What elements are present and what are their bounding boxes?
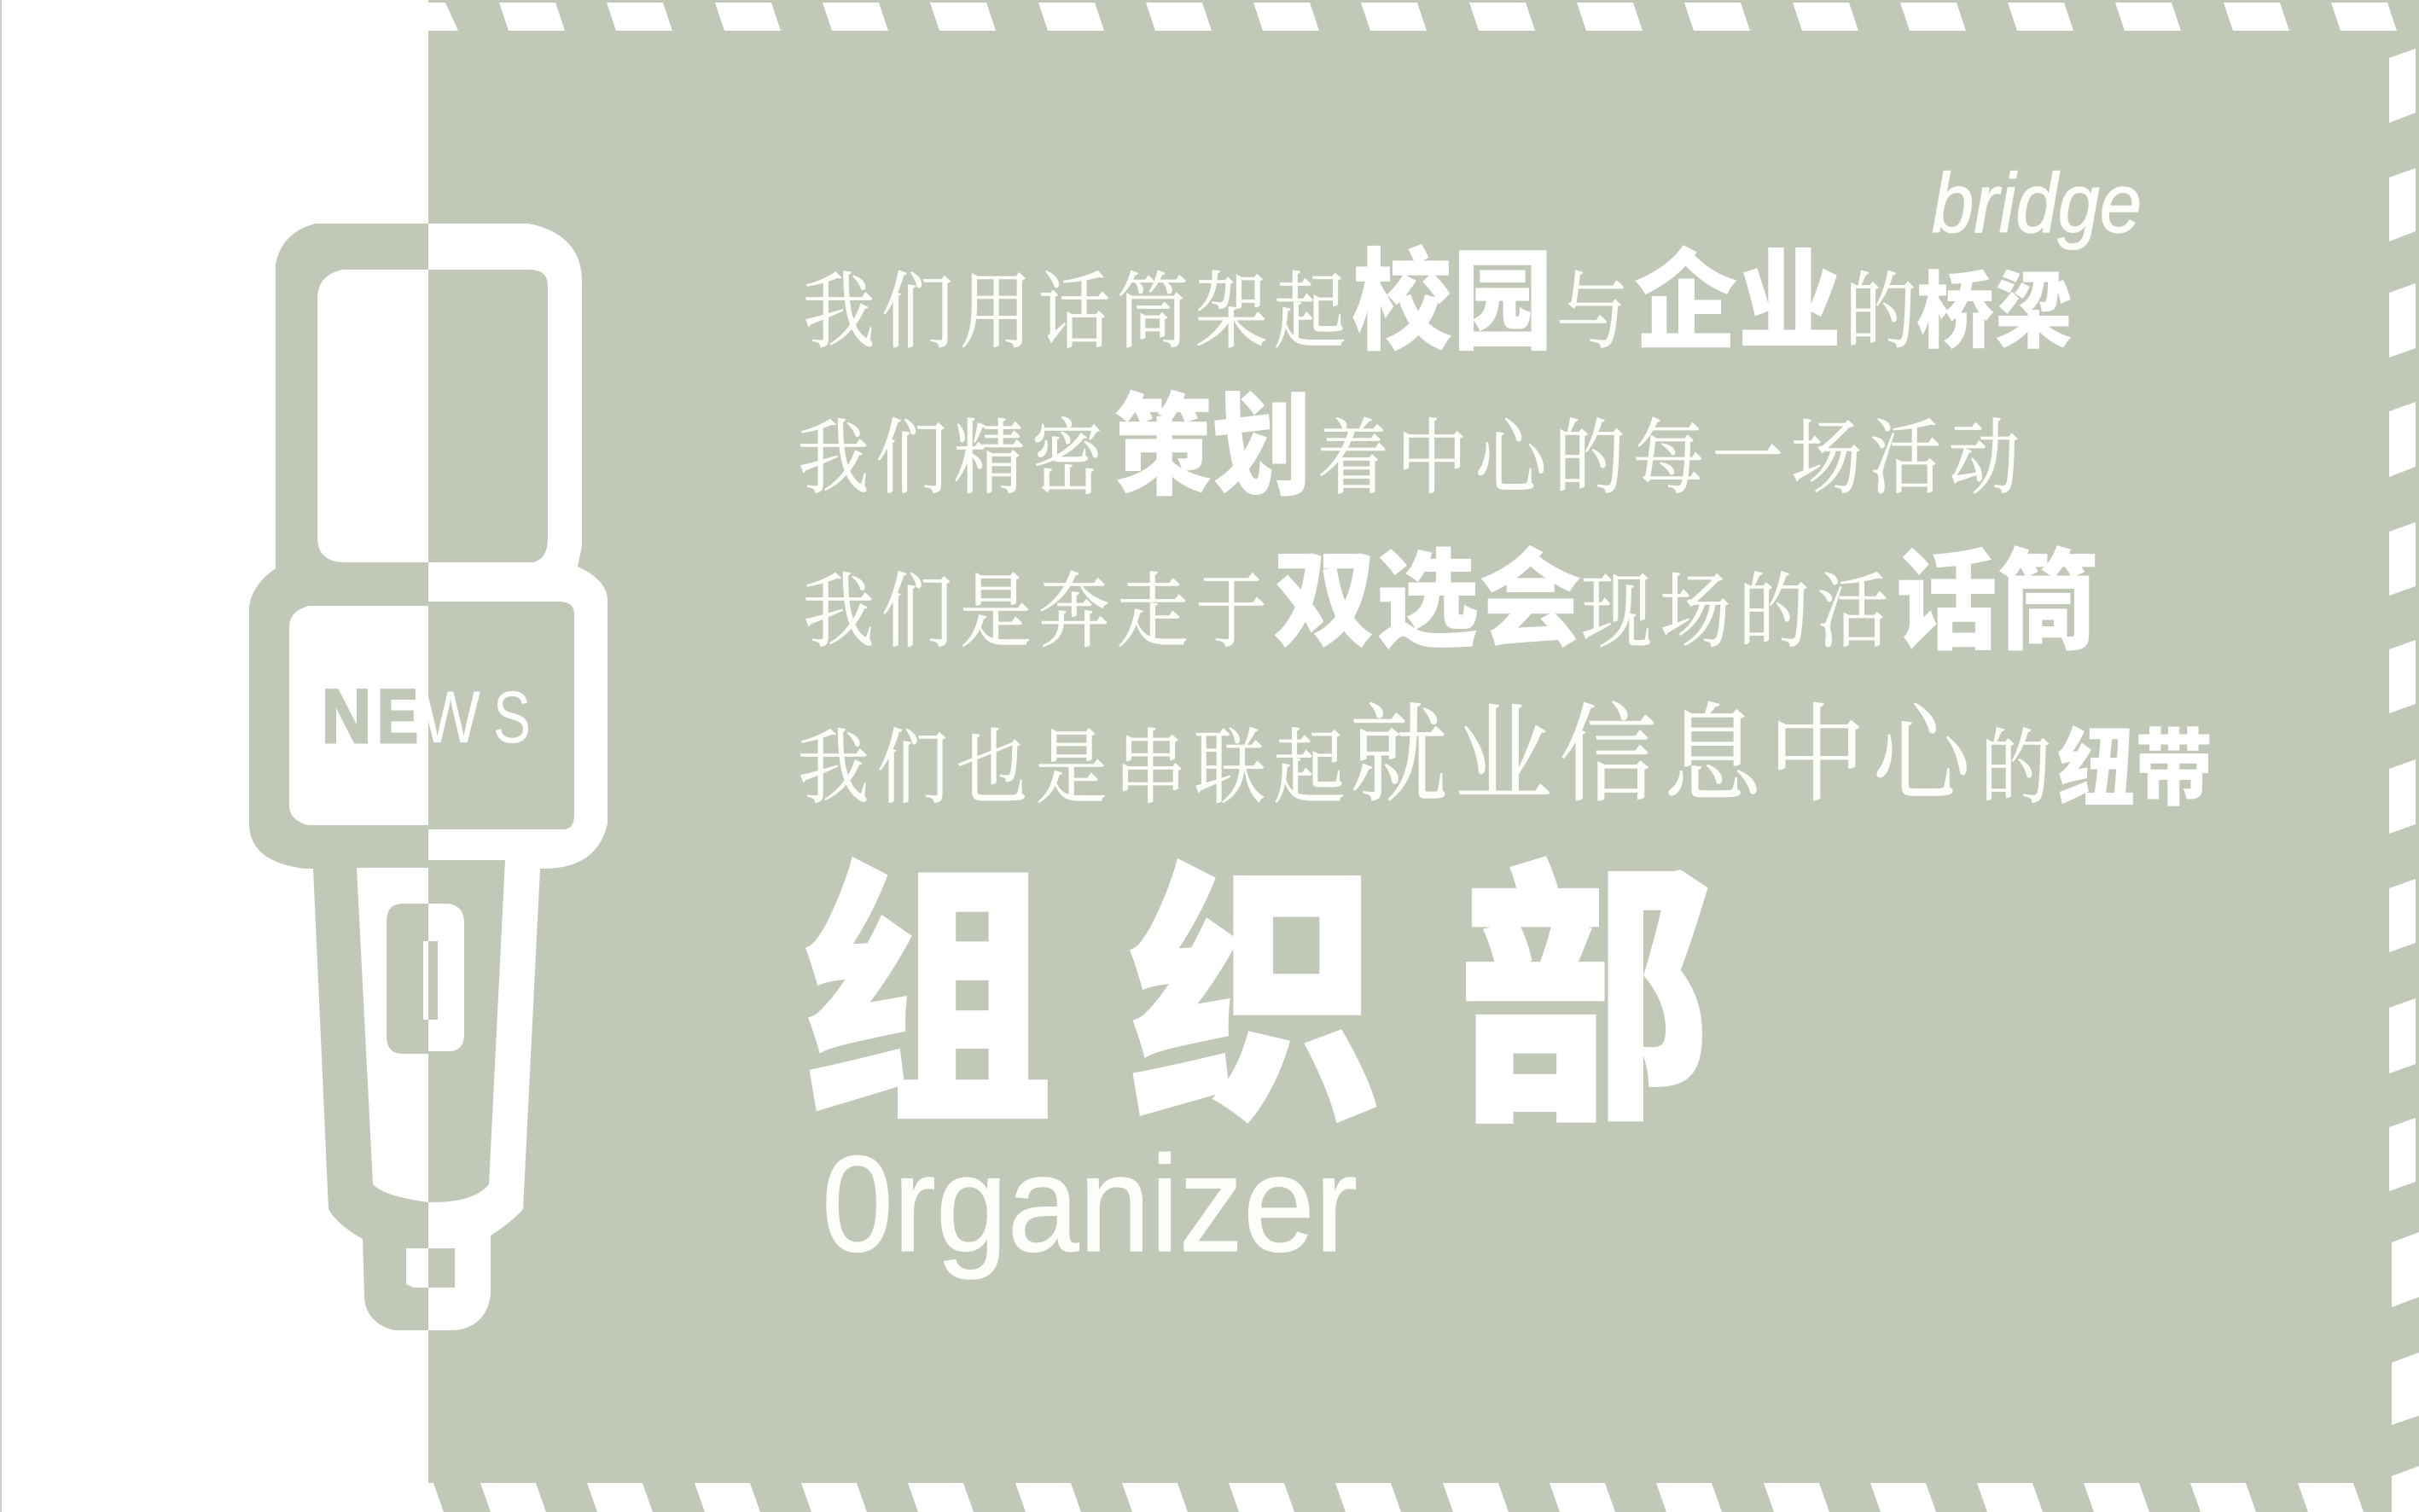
text line 3 bbox=[803, 542, 2099, 664]
subtitle: 0rganizer: 0rganizer bbox=[822, 1127, 1358, 1280]
label: NEWS bbox=[322, 673, 531, 759]
text line 1: 桥梁 bbox=[1916, 265, 2073, 359]
label: NEWS: S bbox=[493, 677, 531, 759]
text line 2: 着中心的每一场活动 bbox=[1317, 415, 2027, 504]
label: NEWS: E bbox=[377, 673, 418, 759]
icon: two-tone news microphone bbox=[249, 224, 608, 1330]
text line 1: 的 bbox=[1845, 266, 1923, 358]
text line 4: 纽带 bbox=[2057, 723, 2213, 817]
text line 1: 与 bbox=[1556, 266, 1635, 358]
text line 2: 我们精密 bbox=[798, 415, 1109, 504]
text line 3: 现场的活 bbox=[1581, 568, 1896, 658]
label: bridge: bridge bbox=[1932, 156, 2142, 250]
bottom perforated edge bbox=[428, 1483, 2364, 1512]
text line 4: 就业信息中心 bbox=[1350, 696, 1978, 815]
right perforated edge bbox=[2389, 49, 2419, 1512]
text line 4 bbox=[798, 696, 2213, 817]
text line 4: 我们也是串联起 bbox=[798, 724, 1352, 814]
text line 3: 我们是奔走于 bbox=[803, 568, 1274, 658]
text line 3: 双选会 bbox=[1273, 542, 1582, 660]
text line 4: 的 bbox=[1980, 724, 2058, 814]
label: NEWS: N bbox=[322, 673, 371, 759]
text line 2: 策划 bbox=[1114, 386, 1311, 509]
text line 1 bbox=[803, 241, 2073, 364]
text line 3: 话筒 bbox=[1896, 542, 2099, 664]
text line 1: 企业 bbox=[1634, 241, 1841, 363]
label: NEWS: W bbox=[421, 677, 480, 759]
top perforated edge bbox=[428, 3, 2397, 31]
text line 1: 校园 bbox=[1352, 241, 1553, 364]
text line 1: 我们用话筒架起 bbox=[803, 266, 1352, 358]
title: 组织部: 组织部 bbox=[800, 847, 1711, 1154]
text line 2 bbox=[798, 386, 2027, 509]
